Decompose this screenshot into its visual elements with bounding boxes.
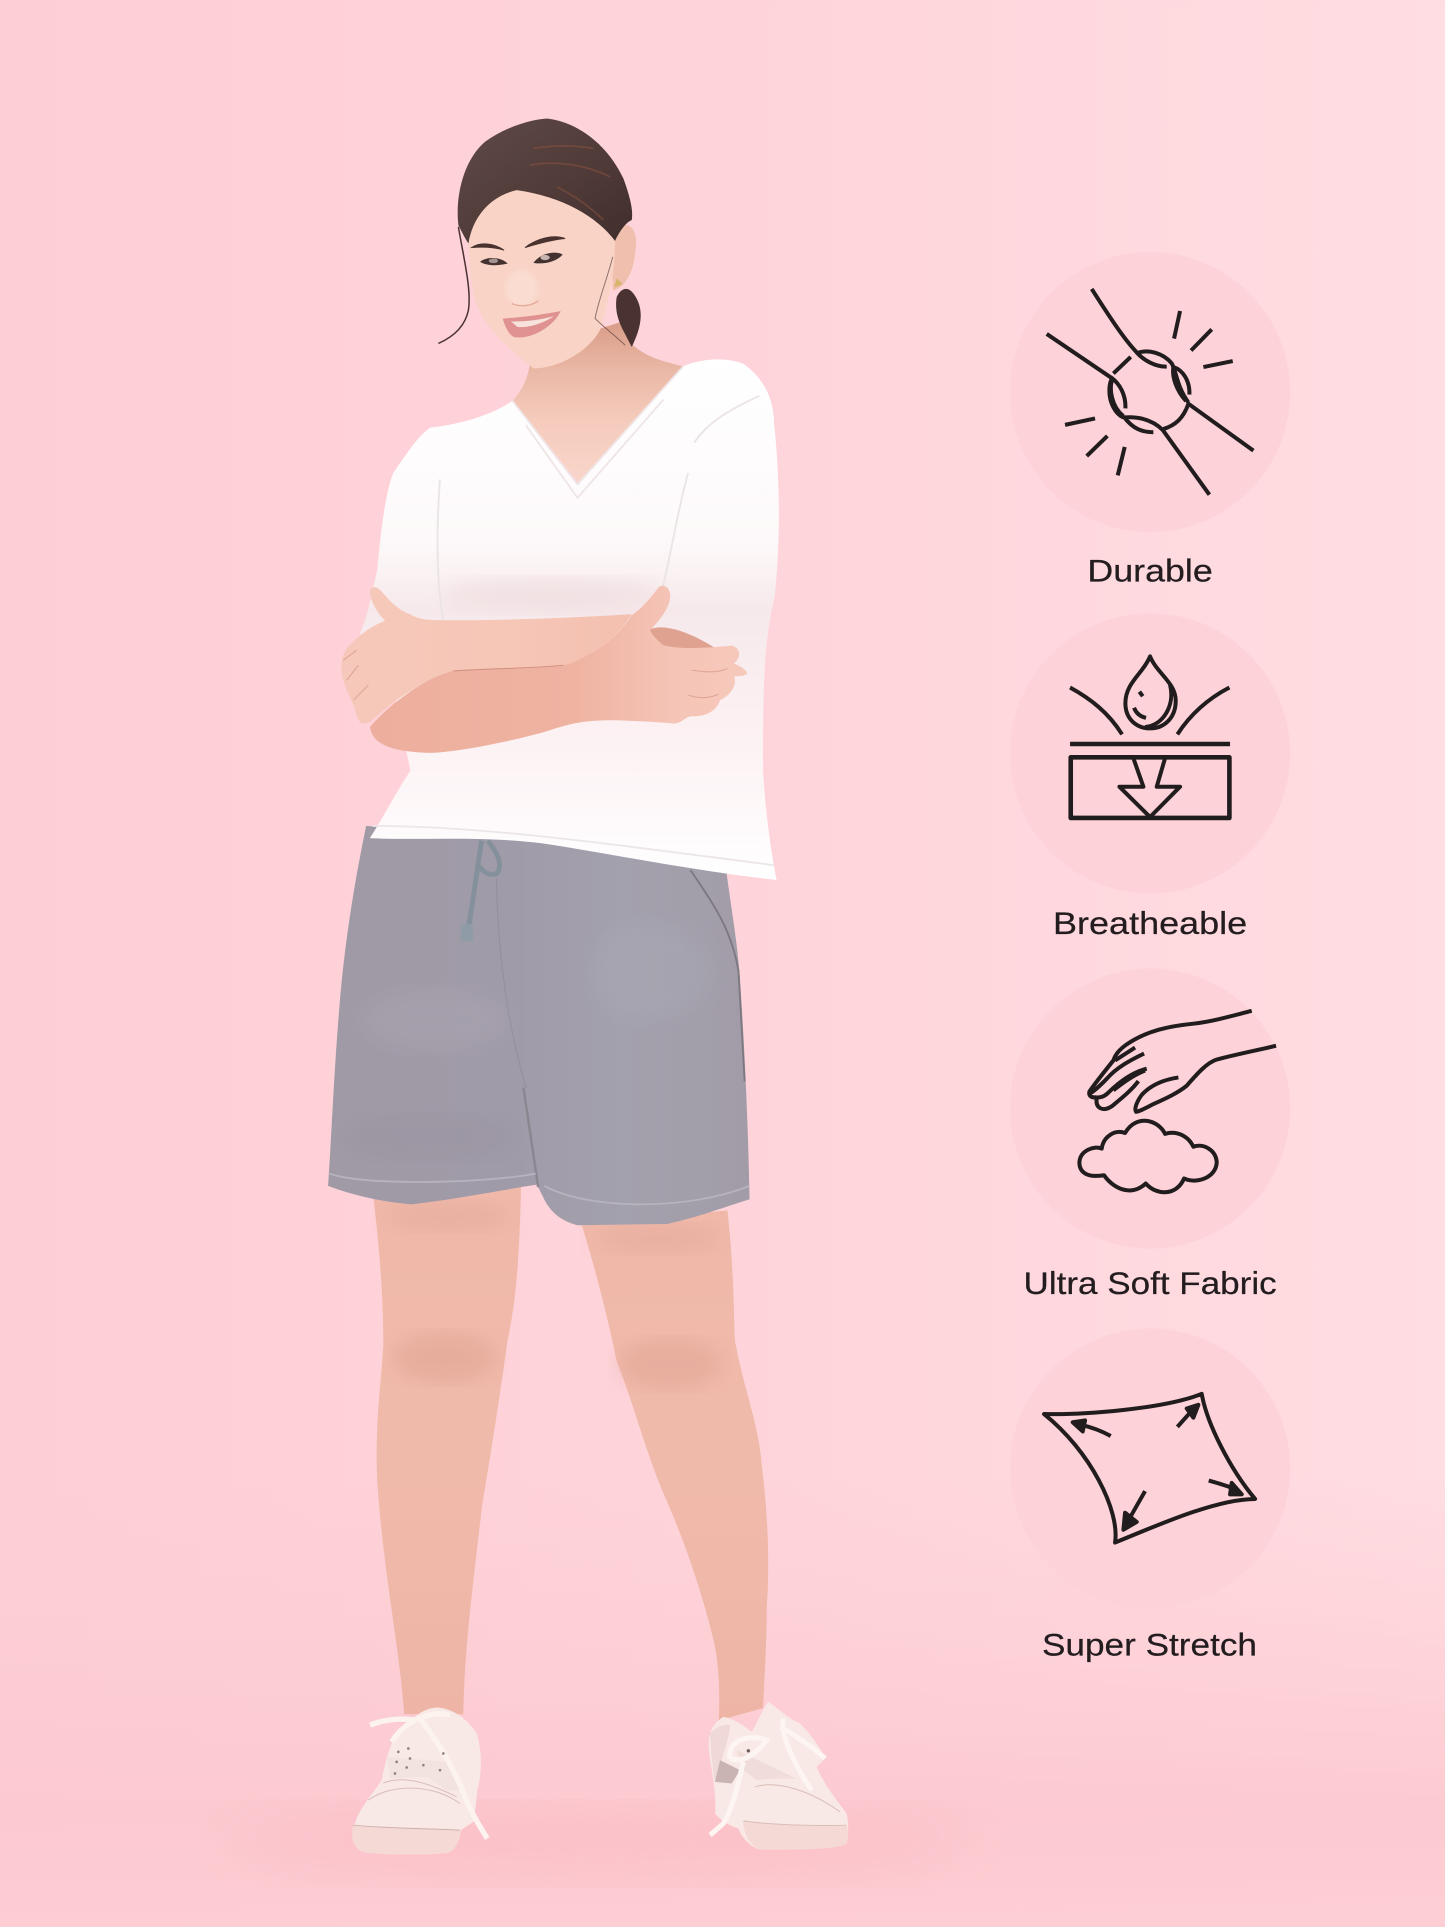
icon: hand over cloud [1079,1011,1276,1192]
label: Ultra Soft Fabric: Ultra Soft Fabric [1024,1266,1277,1301]
head and face [438,118,641,368]
icon: stretching fabric [1044,1394,1255,1543]
label: Durable: Durable [1087,553,1213,588]
model photo illustration [328,118,848,1855]
shorts [328,826,750,1225]
feature: Ultra Soft Fabric [1010,968,1290,1301]
icon circle: stretch [1010,1328,1290,1609]
neck [512,322,683,484]
label: Super Stretch: Super Stretch [1042,1627,1257,1662]
label: Breatheable: Breatheable [1053,906,1247,941]
ponytail [616,289,641,347]
feature: Super Stretch [1010,1328,1290,1662]
feature: Durable [1010,252,1290,588]
left shoe [352,1708,487,1855]
right shoe [709,1702,848,1850]
feature: Breatheable [1010,613,1290,941]
icon: water drop on fabric [1070,656,1230,818]
icon circle: soft fabric [1010,968,1290,1249]
icon: linked hands [1047,289,1253,495]
legs [374,1186,768,1720]
icon circle: breatheable [1010,613,1290,893]
icon circle: durable [1010,252,1290,532]
crossed arms [341,586,747,753]
t-shirt [360,359,779,880]
